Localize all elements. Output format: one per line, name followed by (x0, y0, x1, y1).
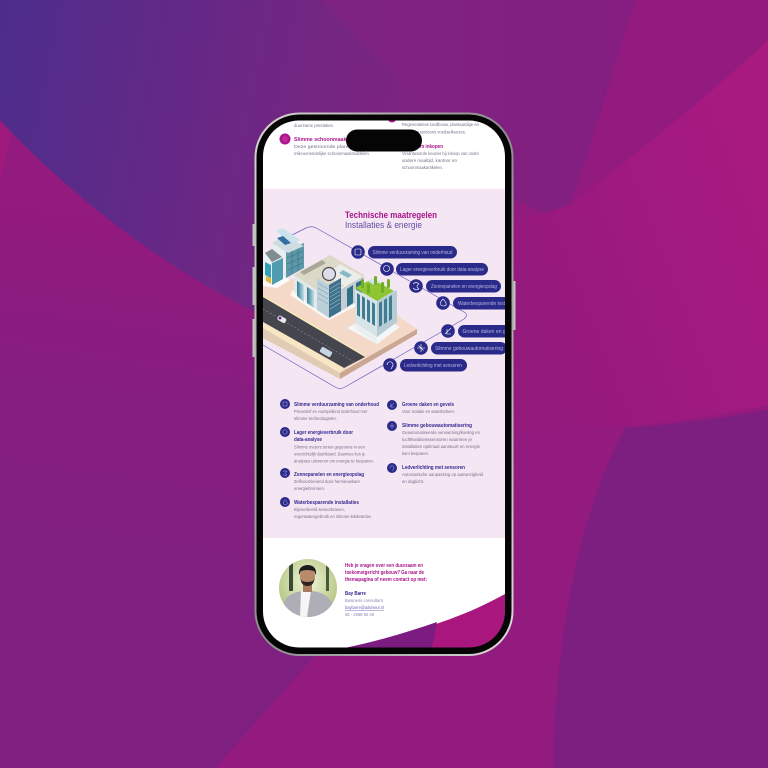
list item: zonnepanelen: energiebronnen. (294, 486, 325, 491)
list item: lager energieverbruik (280, 427, 374, 464)
callout: gebouwautomatisering: Slimme gebouwautomatisering (435, 346, 503, 352)
top text block: previous section: schoonmaakartikelen. (402, 165, 443, 170)
bottom swoosh (345, 594, 505, 648)
panel: technische maatregelen (263, 189, 505, 538)
phone screen (263, 114, 523, 648)
callout: zonnepanelen (409, 279, 501, 293)
callout: groene daken (441, 324, 505, 338)
top text block: previous section: Slimme schoonmaak en (294, 137, 354, 143)
list item: gebouwautomatisering: Slimme gebouwautomatisering (402, 423, 472, 429)
heading: Technische maatregelen (345, 210, 437, 220)
callout: ledverlichting (383, 358, 467, 372)
list item: waterbesparende: Waterbesparende installaties (294, 500, 359, 506)
list item: zonnepanelen: Zonnepanelen en energieopslag (294, 472, 364, 478)
callout: waterbesparende (436, 296, 505, 310)
top text block: previous section: duurzame prestaties. (294, 123, 334, 128)
callout: zonnepanelen: Zonnepanelen en energieopslag (431, 284, 497, 290)
callout: slimme verduurzaming (351, 245, 457, 259)
heading (345, 212, 436, 230)
list item: gebouwautomatisering: Geautomatiseerde verwarming/koeling en (402, 430, 480, 435)
list item: zonnepanelen: Zelfvoorzienend door hernieuwbare (294, 479, 360, 484)
top text block: previous section: milieuvriendelijke schoonmaakmiddelen. (294, 151, 370, 156)
connector line (263, 227, 466, 388)
list item: gebouwautomatisering: luchtkwaliteitssensoren waarmee je (402, 437, 472, 442)
callout: slimme verduurzaming: Slimme verduurzaming van onderhoud (372, 250, 453, 256)
list item: gebouwautomatisering: kunt besparen. (402, 451, 429, 456)
list item: zonnepanelen (280, 468, 364, 491)
list item: lager energieverbruik: Slimme meters tonen gegevens in een (294, 444, 365, 450)
list item: gebouwautomatisering: installaties optimaal aanstuurt en energie (402, 444, 480, 449)
contact text: Business consultant (345, 598, 384, 603)
building 1 (263, 228, 304, 288)
list item: waterbesparende: regenwatergebruik en slimme lekdetectie. (294, 514, 372, 519)
platform (263, 279, 417, 379)
contact text: baybarre@adviseur.nl (345, 605, 384, 610)
list item: ledverlichting: Ledverlichting met sensoren (402, 465, 465, 471)
callout: ledverlichting: Ledverlichting met sensoren (404, 363, 462, 369)
callout: lager energieverbruik: Lager energieverbruik door data-analyse (400, 267, 484, 273)
list item: slimme verduurzaming: slimme technologieën. (294, 416, 337, 421)
list item: slimme verduurzaming (280, 399, 379, 421)
list item: ledverlichting: en daglicht. (402, 479, 424, 484)
top text block: previous section: Duurzaam inkopen (402, 144, 443, 150)
list item: groene daken: Voor isolatie en waterbeheer. (402, 409, 455, 414)
top text block: previous section: Deze gestroomde planning en (294, 144, 365, 149)
callout: groene daken: Groene daken en gevels (462, 329, 518, 335)
list item: slimme verduurzaming: Preventief en voorspellend onderhoud met (294, 409, 368, 414)
callout: waterbesparende: Waterbesparende installaties (458, 301, 520, 307)
list item: waterbesparende: Bijvoorbeeld sensorkranen, (294, 507, 345, 512)
top text block: previous section: Verantwoorde keuzes bij inkoop van onder (402, 151, 479, 156)
building 3 (347, 276, 400, 344)
callout: gebouwautomatisering (414, 341, 507, 355)
list item: slimme verduurzaming: Slimme verduurzaming van onderhoud (294, 402, 379, 408)
contact text: 06 - 2558 90 48 (345, 612, 374, 617)
list item: lager energieverbruik: analyses uitvoeren om energie te besparen. (294, 458, 374, 464)
building 2 (290, 255, 368, 320)
illustration: isometric city block (263, 228, 417, 379)
contact text: toekomstgericht gebouw? Ga naar de (345, 570, 424, 576)
top text block: previous section: Regeneratieve landbouw, plantaardige en (402, 122, 479, 127)
top text block: previous section: lokale en seizoens voedselkeuzes. (402, 130, 466, 134)
dynamic island (346, 130, 422, 152)
contact text: Bay Barre (345, 591, 366, 597)
phone frame (256, 114, 512, 655)
contact text (345, 563, 427, 617)
list item: ledverlichting (387, 463, 483, 484)
contact text: themapagina of neem contact op met: (345, 577, 427, 583)
list item: waterbesparende (280, 497, 372, 519)
list item: groene daken (387, 400, 455, 414)
phone side buttons (252, 224, 516, 357)
list item: groene daken: Groene daken en gevels (402, 402, 454, 408)
top text block: previous section: andere maaltijd, kantoor en (402, 158, 457, 163)
callout: lager energieverbruik (380, 262, 488, 276)
portrait photo (279, 559, 337, 617)
contact text: Heb je vragen over een duurzaam en (345, 563, 423, 569)
vehicles (277, 315, 333, 358)
list item: lager energieverbruik: Lager energieverbruik door (294, 430, 353, 436)
top text block: previous section (280, 120, 479, 169)
list item: lager energieverbruik: overzichtelijk dashboard. Daarmee kun je (294, 452, 365, 456)
list item: lager energieverbruik: data-analyse (294, 437, 322, 443)
list item: gebouwautomatisering (387, 421, 480, 456)
heading: Installaties & energie (345, 220, 422, 231)
list item: ledverlichting: Automatische aanpassing op aanwezigheid (402, 472, 483, 477)
